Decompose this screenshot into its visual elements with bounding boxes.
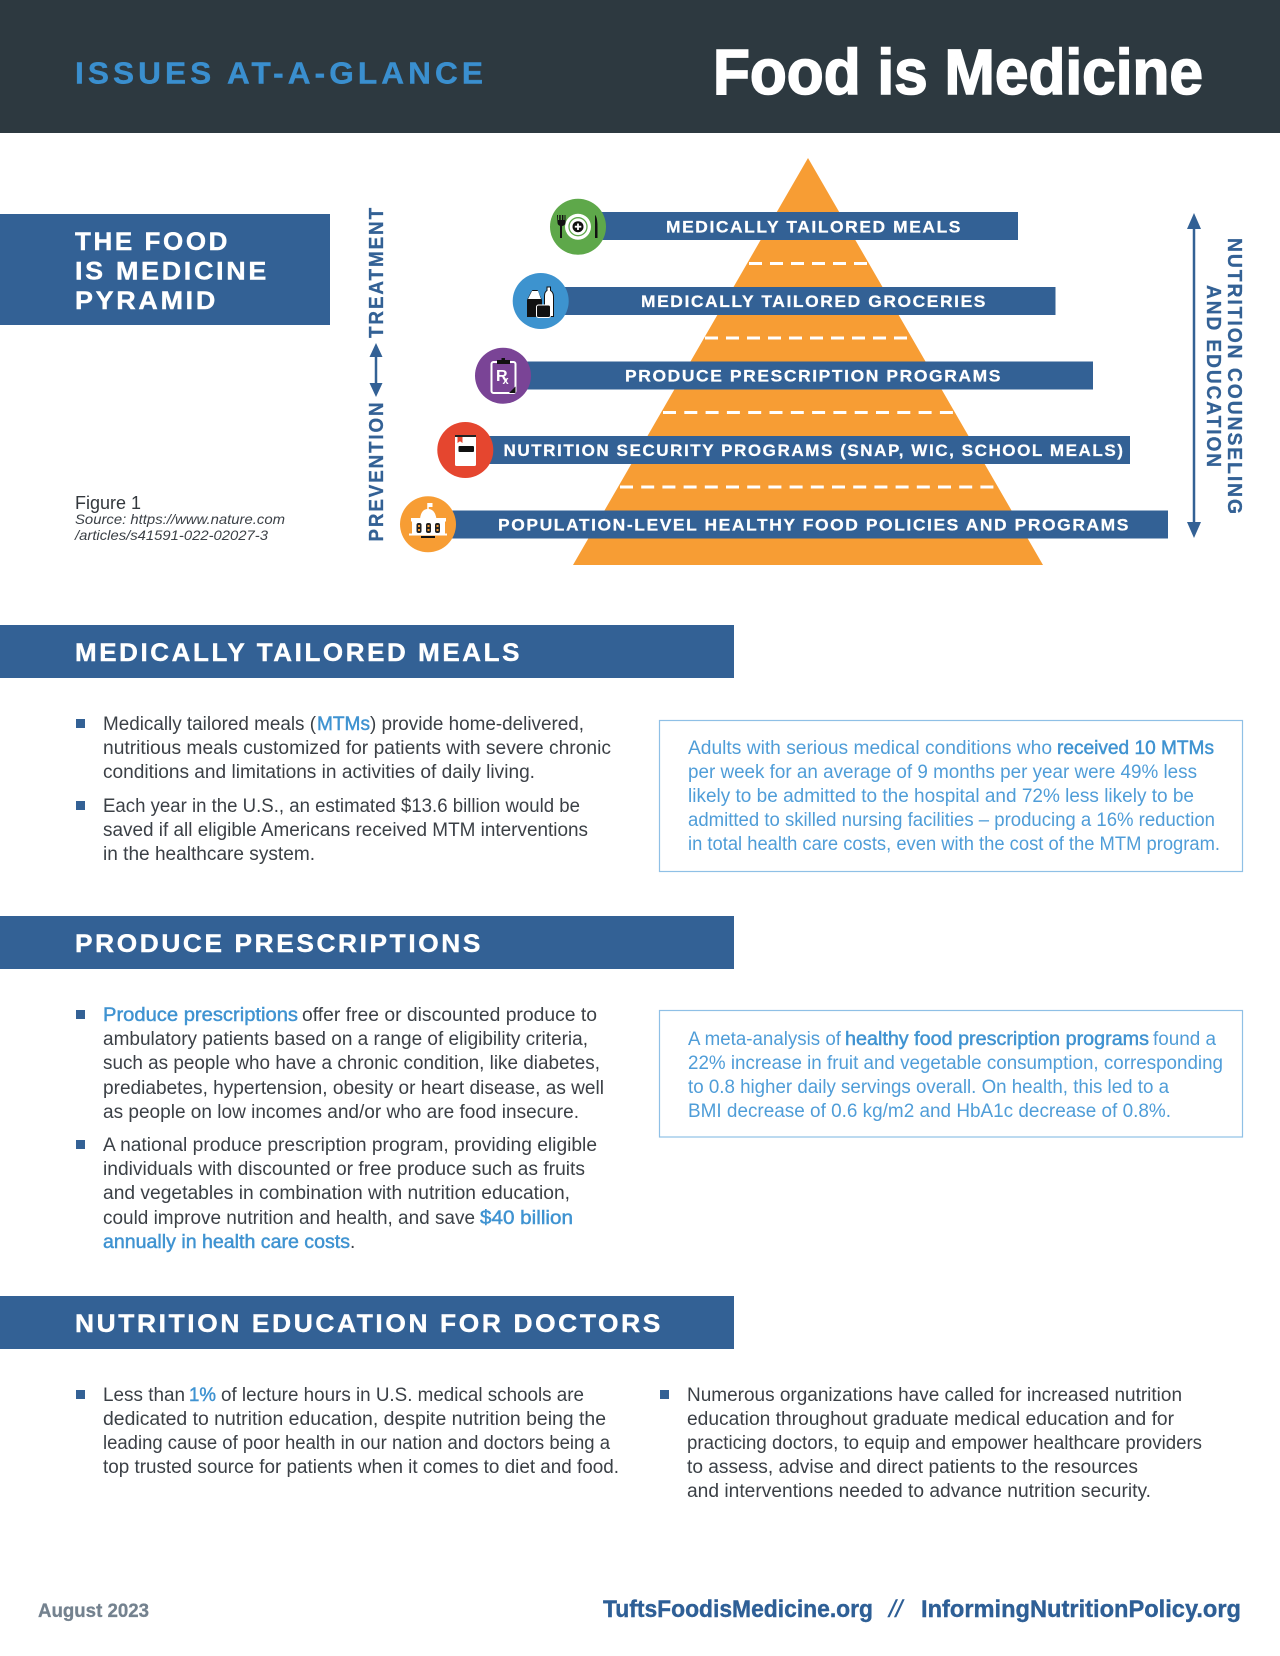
icon: plate and cutlery bbox=[550, 199, 606, 255]
bullets: education right column: and interventions needed to advance nutrition security. bbox=[687, 1481, 1151, 1502]
bullets: produce prescriptions: prediabetes, hypertension, obesity or heart disease, as well bbox=[103, 1078, 604, 1099]
bullets: medically tailored meals: in the healthcare system. bbox=[103, 844, 315, 865]
bullets: medically tailored meals: ) provide home-delivered, bbox=[370, 714, 584, 735]
callout: MTM outcomes: per week for an average of 9 months per year were 49% less bbox=[688, 762, 1197, 783]
bullets: produce prescriptions: Produce prescriptions bbox=[103, 1005, 298, 1026]
section heading: produce prescriptions bbox=[0, 916, 734, 969]
bullets: medically tailored meals: Medically tailored meals ( bbox=[103, 714, 317, 735]
bullets: produce prescriptions: as people on low incomes and/or who are food insecure. bbox=[103, 1102, 579, 1123]
section heading: produce prescriptions: PRODUCE PRESCRIPTIONS bbox=[75, 930, 483, 958]
bullets: produce prescriptions: ambulatory patients based on a range of eligibility criteria, bbox=[103, 1029, 588, 1050]
footer links: InformingNutritionPolicy.org bbox=[921, 1596, 1241, 1623]
panel: pyramid title: PYRAMID bbox=[75, 287, 218, 315]
bullets: education left column: leading cause of poor health in our nation and doctors being a bbox=[103, 1433, 610, 1454]
bullets: education left column bbox=[76, 1385, 619, 1478]
icon: benefit card bbox=[437, 422, 493, 478]
callout: MTM outcomes: admitted to skilled nursing facilities – producing a 16% reduction bbox=[688, 810, 1215, 831]
bullets: education left column: Less than bbox=[103, 1385, 185, 1406]
callout: MTM outcomes: Adults with serious medical conditions who bbox=[688, 738, 1052, 759]
bullets: produce prescriptions: annually in health care costs bbox=[103, 1232, 350, 1253]
bullets: medically tailored meals: nutritious meals customized for patients with severe chronic bbox=[103, 738, 611, 759]
section heading: nutrition education for doctors: NUTRITION EDUCATION FOR DOCTORS bbox=[75, 1310, 663, 1338]
tier: medically tailored meals: MEDICALLY TAILORED MEALS bbox=[666, 218, 962, 236]
footer links bbox=[603, 1596, 1241, 1623]
tier: population-level policies: POPULATION-LEVEL HEALTHY FOOD POLICIES AND PROGRAMS bbox=[498, 516, 1130, 534]
section heading: medically tailored meals bbox=[0, 625, 734, 678]
callout: meta-analysis: healthy food prescription programs bbox=[845, 1029, 1149, 1050]
bullets: education left column: of lecture hours in U.S. medical schools are bbox=[221, 1385, 584, 1406]
bullets: education right column: Numerous organizations have called for increased nutrition bbox=[687, 1385, 1182, 1406]
bullets: education left column: 1% bbox=[189, 1385, 216, 1406]
callout: MTM outcomes: likely to be admitted to the hospital and 72% less likely to be bbox=[688, 786, 1194, 807]
axis: prevention to treatment: TREATMENT bbox=[366, 206, 388, 338]
section heading: nutrition education for doctors bbox=[0, 1296, 734, 1349]
bullets: medically tailored meals: MTMs bbox=[317, 714, 370, 735]
callout: meta-analysis bbox=[660, 1010, 1242, 1137]
callout: meta-analysis: A meta-analysis of bbox=[688, 1029, 842, 1050]
icon: prescription clipboard: R bbox=[496, 368, 508, 385]
callout: meta-analysis: found a bbox=[1153, 1029, 1216, 1050]
bullets: produce prescriptions: such as people who have a chronic condition, like diabetes, bbox=[103, 1053, 600, 1074]
tier: produce prescription programs bbox=[515, 362, 1093, 390]
tier: population-level policies bbox=[440, 510, 1168, 538]
pyramid chart bbox=[400, 158, 1168, 565]
figure caption: Figure 1 bbox=[75, 493, 141, 513]
figure caption bbox=[74, 493, 285, 543]
header banner bbox=[0, 0, 1280, 133]
axis: nutrition counseling and education: AND EDUCATION bbox=[1202, 285, 1224, 469]
figure caption: /articles/s41591-022-02027-3 bbox=[74, 527, 268, 543]
icon: government building bbox=[400, 496, 456, 552]
tier: nutrition security programs bbox=[477, 436, 1130, 464]
bullets: produce prescriptions: and vegetables in combination with nutrition education, bbox=[103, 1183, 570, 1204]
bullets: medically tailored meals: conditions and limitations in activities of daily living. bbox=[103, 762, 535, 783]
tier: medically tailored groceries: MEDICALLY TAILORED GROCERIES bbox=[641, 293, 987, 311]
bullets: produce prescriptions bbox=[76, 1005, 604, 1253]
bullets: education right column bbox=[660, 1385, 1202, 1502]
pyramid shape bbox=[573, 158, 1043, 565]
bullets: medically tailored meals: saved if all eligible Americans received MTM interventions bbox=[103, 820, 588, 841]
bullets: medically tailored meals: Each year in the U.S., an estimated $13.6 billion would be bbox=[103, 796, 580, 817]
bullets: produce prescriptions: offer free or discounted produce to bbox=[302, 1005, 597, 1026]
callout: MTM outcomes: in total health care costs, even with the cost of the MTM program. bbox=[688, 834, 1220, 855]
kicker: issues at-a-glance: ISSUES AT-A-GLANCE bbox=[75, 56, 487, 90]
bullets: education right column: to assess, advise and direct patients to the resources bbox=[687, 1457, 1138, 1478]
main title: Food is Medicine bbox=[713, 36, 1203, 108]
footer links: // bbox=[887, 1596, 905, 1623]
callout: meta-analysis: BMI decrease of 0.6 kg/m2 and HbA1c decrease of 0.8%. bbox=[688, 1101, 1171, 1122]
bullets: produce prescriptions: $40 billion bbox=[480, 1208, 573, 1229]
icon: prescription clipboard: x bbox=[502, 375, 510, 387]
axis: prevention to treatment bbox=[366, 206, 388, 542]
callout: MTM outcomes: received 10 MTMs bbox=[1057, 738, 1214, 759]
axis: nutrition counseling and education: NUTRITION COUNSELING bbox=[1223, 238, 1245, 516]
bullets: medically tailored meals bbox=[76, 714, 611, 865]
figure caption: Source: https://www.nature.com bbox=[75, 511, 285, 527]
footer links: TuftsFoodisMedicine.org bbox=[603, 1596, 873, 1623]
bullets: education right column: education throughout graduate medical education and for bbox=[687, 1409, 1175, 1430]
axis: prevention to treatment: PREVENTION bbox=[366, 400, 388, 542]
bullets: produce prescriptions: . bbox=[350, 1232, 355, 1253]
bullets: produce prescriptions: A national produce prescription program, providing eligible bbox=[103, 1135, 597, 1156]
tier: produce prescription programs: PRODUCE PRESCRIPTION PROGRAMS bbox=[625, 368, 1002, 386]
panel: pyramid title bbox=[0, 214, 330, 325]
section heading: medically tailored meals: MEDICALLY TAILORED MEALS bbox=[75, 639, 522, 667]
tier: nutrition security programs: NUTRITION SECURITY PROGRAMS (SNAP, WIC, SCHOOL MEALS) bbox=[504, 442, 1124, 460]
callout: meta-analysis: 22% increase in fruit and vegetable consumption, corresponding bbox=[688, 1053, 1223, 1074]
icon: prescription clipboard bbox=[475, 348, 531, 404]
tier: medically tailored groceries bbox=[552, 287, 1056, 315]
bullets: produce prescriptions: could improve nutrition and health, and save bbox=[103, 1208, 475, 1229]
icon: grocery items bbox=[513, 273, 569, 329]
bullets: produce prescriptions: individuals with discounted or free produce such as fruits bbox=[103, 1159, 585, 1180]
callout: MTM outcomes bbox=[660, 720, 1242, 872]
bullets: education right column: practicing doctors, to equip and empower healthcare providers bbox=[687, 1433, 1202, 1454]
panel: pyramid title: THE FOOD bbox=[75, 228, 230, 256]
bullets: education left column: dedicated to nutrition education, despite nutrition being the bbox=[103, 1409, 606, 1430]
callout: meta-analysis: to 0.8 higher daily servings overall. On health, this led to a bbox=[688, 1077, 1169, 1098]
footer date: August 2023 bbox=[38, 1601, 149, 1622]
tier: medically tailored meals bbox=[590, 212, 1018, 240]
axis: nutrition counseling and education bbox=[1187, 213, 1245, 538]
bullets: education left column: top trusted source for patients when it comes to diet and food. bbox=[103, 1457, 619, 1478]
panel: pyramid title: IS MEDICINE bbox=[75, 258, 269, 286]
